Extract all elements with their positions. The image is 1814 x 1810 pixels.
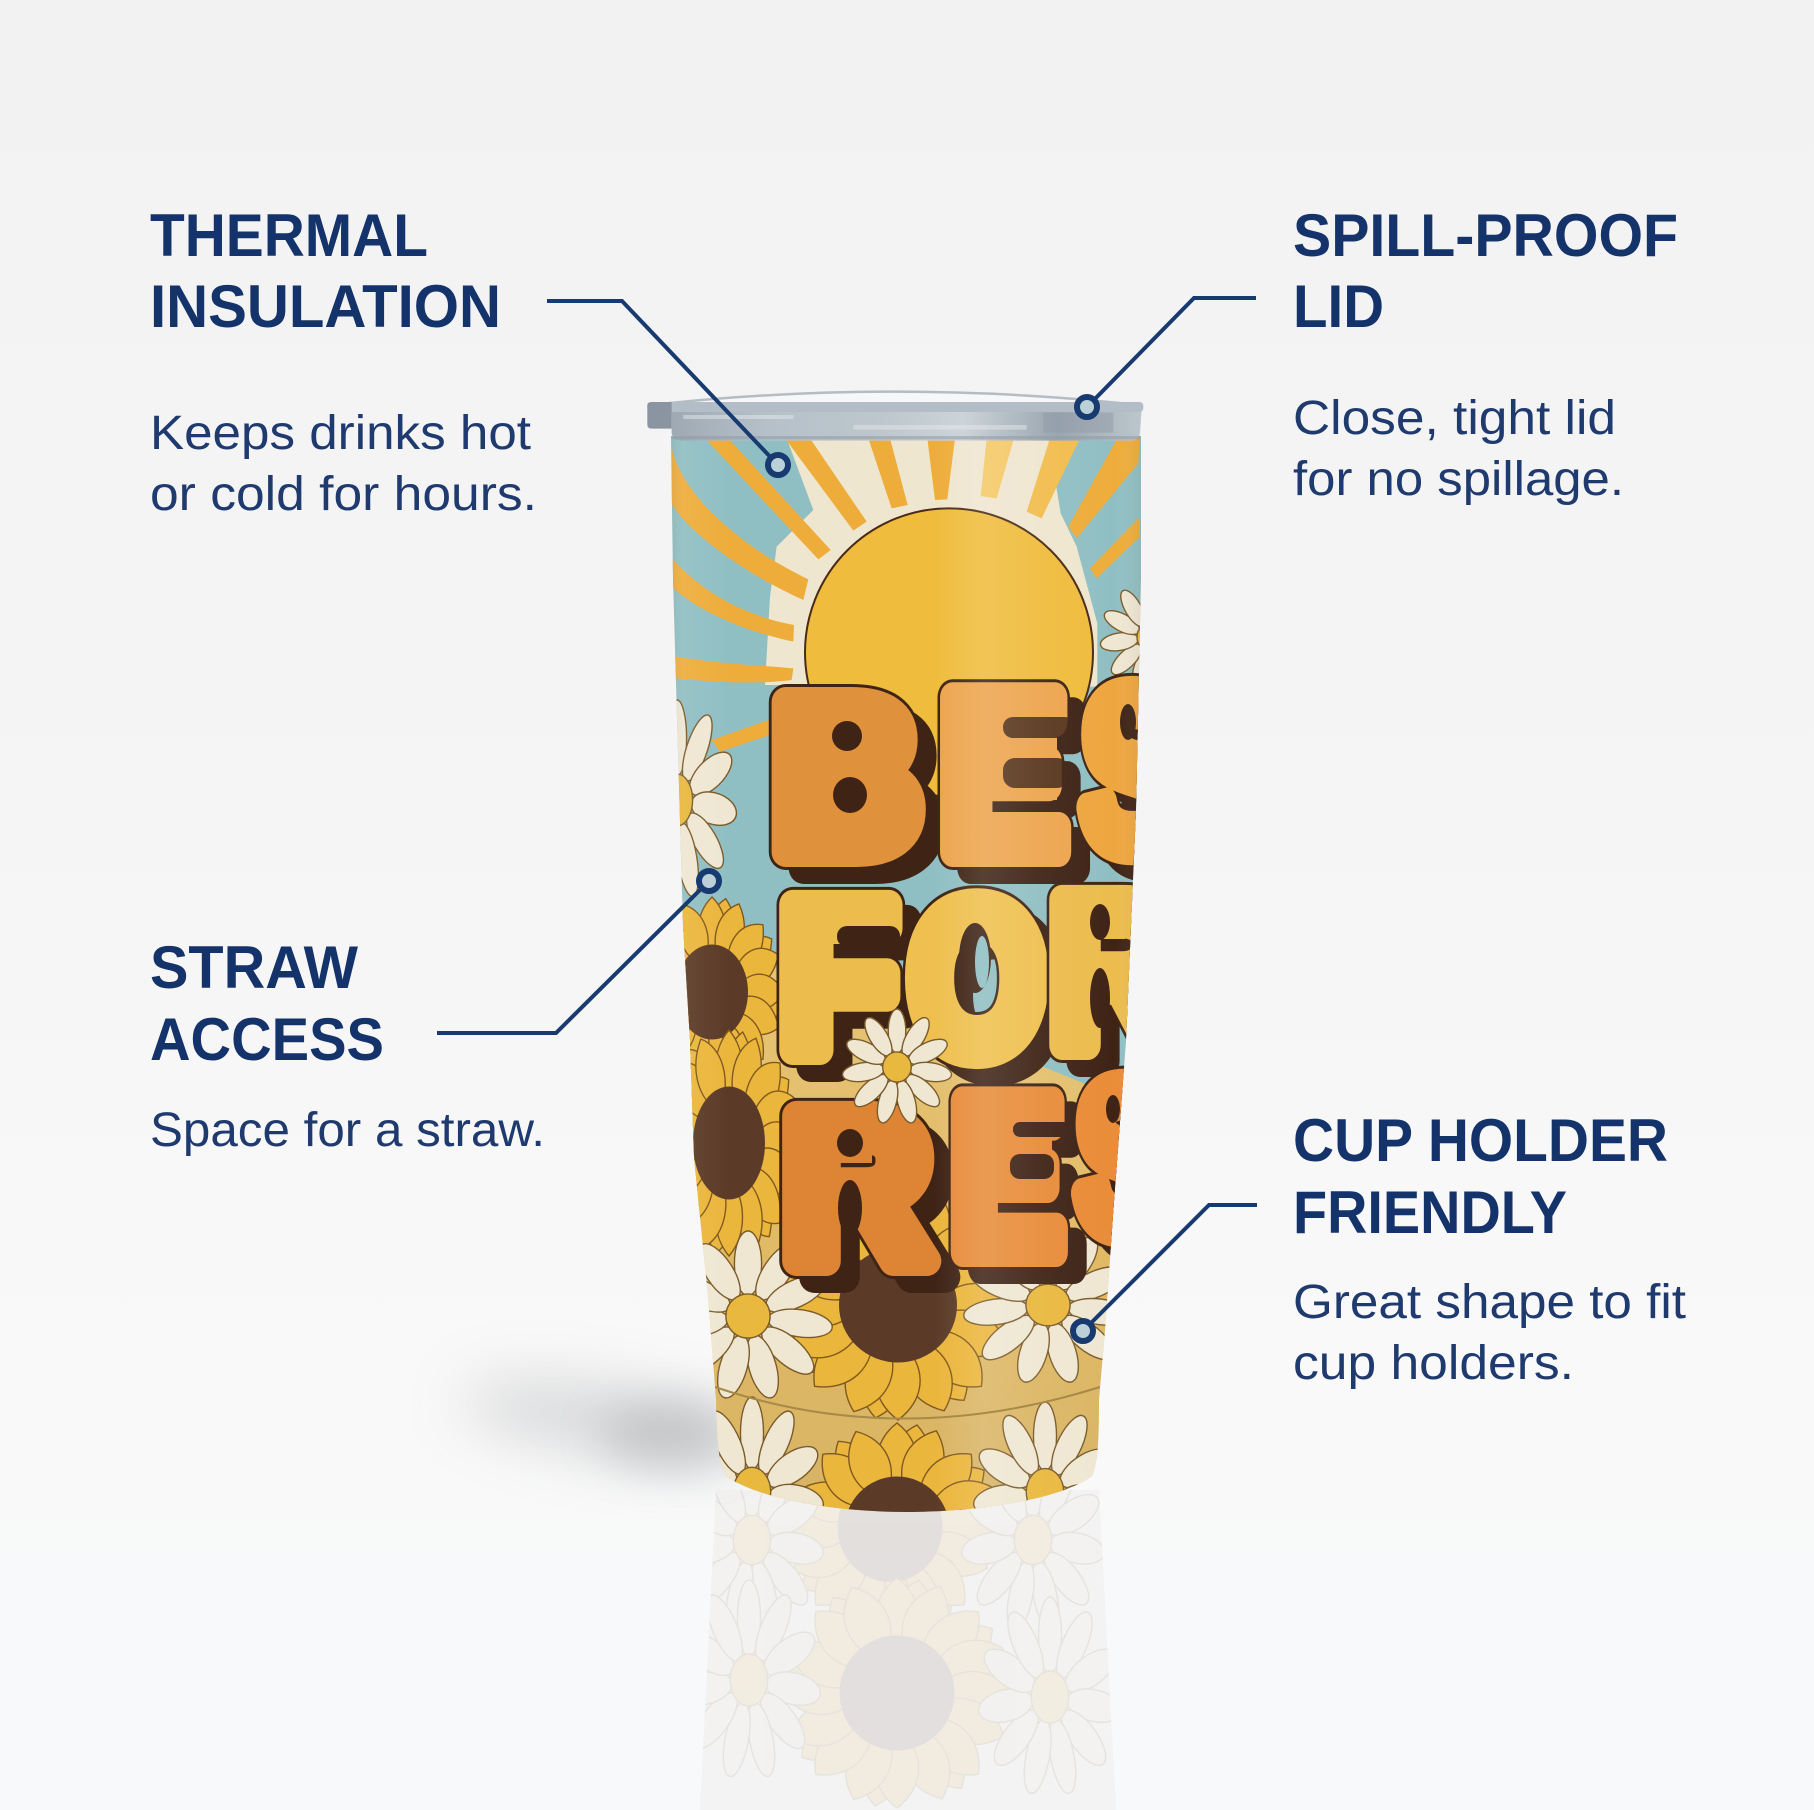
lettering BEST row: B — [772, 656, 921, 899]
lid inner detail — [683, 415, 1027, 430]
lettering shadows: F — [798, 875, 914, 1111]
description: cup holders. — [1293, 1337, 1574, 1390]
description — [1293, 1276, 1686, 1390]
heading — [1293, 202, 1678, 340]
description — [1293, 392, 1624, 506]
leader line — [1077, 298, 1256, 417]
lettering REST row: S — [1077, 1040, 1172, 1276]
O counter sky sliver — [975, 936, 989, 988]
lettering BEST row — [768, 672, 1139, 870]
lettering REST row: S — [1077, 1040, 1172, 1276]
lettering FOR row: R — [1050, 854, 1180, 1090]
sunflower centre — [787, 1204, 1002, 1421]
lid rim — [647, 402, 1143, 412]
daisy lower right — [963, 1237, 1110, 1383]
lettering FOR row: F — [780, 859, 896, 1095]
rays — [672, 433, 1140, 752]
tumbler body artwork — [671, 436, 1141, 1512]
sky — [660, 430, 1150, 1130]
sun disc — [805, 508, 1093, 796]
lettering shadows: S — [1100, 660, 1200, 912]
heading: SPILL-PROOF — [1293, 202, 1678, 269]
lettering shadows: E — [969, 1071, 1081, 1315]
heading: ACCESS — [150, 1006, 384, 1073]
lettering shadows: B — [790, 672, 939, 915]
heading — [150, 934, 384, 1073]
letter interior fills — [830, 737, 1125, 1163]
sun and rays — [672, 433, 1140, 796]
description — [150, 407, 537, 521]
lettering REST row: E — [951, 1055, 1063, 1299]
lettering REST row: E — [951, 1055, 1063, 1299]
daisy base left — [716, 1396, 824, 1506]
lid tab — [647, 402, 672, 429]
lettering FOR row: O — [910, 860, 1044, 1098]
lettering shadows: R — [1068, 870, 1198, 1106]
lettering REST row: R — [783, 1070, 931, 1306]
callout: straw access — [150, 871, 719, 1157]
lettering FOR row — [776, 882, 1133, 1070]
lettering FOR row: F — [780, 859, 896, 1095]
heading — [150, 202, 501, 340]
callout: cup holder friendly — [1073, 1107, 1686, 1390]
heading: THERMAL — [150, 202, 428, 269]
sunflower upper left — [682, 896, 776, 1078]
lettering REST row: R — [783, 1070, 931, 1306]
base seam — [715, 1387, 1100, 1418]
lettering FOR row: R — [1050, 854, 1180, 1090]
leader line — [547, 301, 788, 475]
daisy centre front — [841, 1009, 953, 1125]
heading: LID — [1293, 273, 1384, 340]
callout: spill-proof lid — [1077, 202, 1678, 506]
lettering BEST row: E — [940, 648, 1066, 900]
sunflower on base — [802, 1422, 992, 1512]
lettering shadows — [788, 692, 1139, 1293]
heading: INSULATION — [150, 273, 501, 340]
sunflower middle left — [690, 1029, 796, 1257]
description: or cold for hours. — [150, 468, 537, 521]
heading: FRIENDLY — [1293, 1179, 1567, 1246]
lettering BEST row: E — [940, 648, 1066, 900]
tumbler — [647, 390, 1144, 1512]
description: Great shape to fit — [1293, 1276, 1686, 1329]
leader line — [437, 871, 719, 1033]
lettering shadows: O — [928, 876, 1062, 1114]
cream halo — [765, 438, 1097, 687]
heading: STRAW — [150, 934, 358, 1001]
lid side band — [672, 408, 1142, 441]
lid top — [667, 392, 1123, 412]
leader line — [1073, 1205, 1257, 1341]
description: for no spillage. — [1293, 453, 1624, 506]
lettering shadows: R — [801, 1086, 949, 1322]
body sheen — [660, 430, 1150, 1520]
daisy left — [676, 699, 738, 897]
lettering shadows: E — [958, 664, 1084, 916]
lettering BEST row: B — [772, 656, 921, 899]
description: Space for a straw. — [150, 1104, 545, 1157]
lettering shadows: S — [1095, 1056, 1190, 1292]
description: Keeps drinks hot — [150, 407, 531, 460]
lettering BEST row: S — [1082, 644, 1182, 896]
daisy lower left — [702, 1230, 833, 1399]
lettering BEST row: S — [1082, 644, 1182, 896]
lid — [647, 392, 1143, 441]
lettering FOR row: O — [910, 860, 1044, 1098]
daisy upper right — [1100, 590, 1140, 690]
heading — [1293, 1107, 1668, 1246]
description: Close, tight lid — [1293, 392, 1616, 445]
heading: CUP HOLDER — [1293, 1107, 1668, 1174]
cast shadow — [457, 1367, 763, 1473]
lettering REST row — [779, 1066, 1124, 1279]
tumbler reflection — [703, 1490, 1112, 1809]
callout: thermal insulation — [150, 202, 788, 521]
letter counters — [832, 704, 1136, 1236]
daisy base right — [972, 1401, 1098, 1508]
ground — [684, 948, 1122, 1512]
